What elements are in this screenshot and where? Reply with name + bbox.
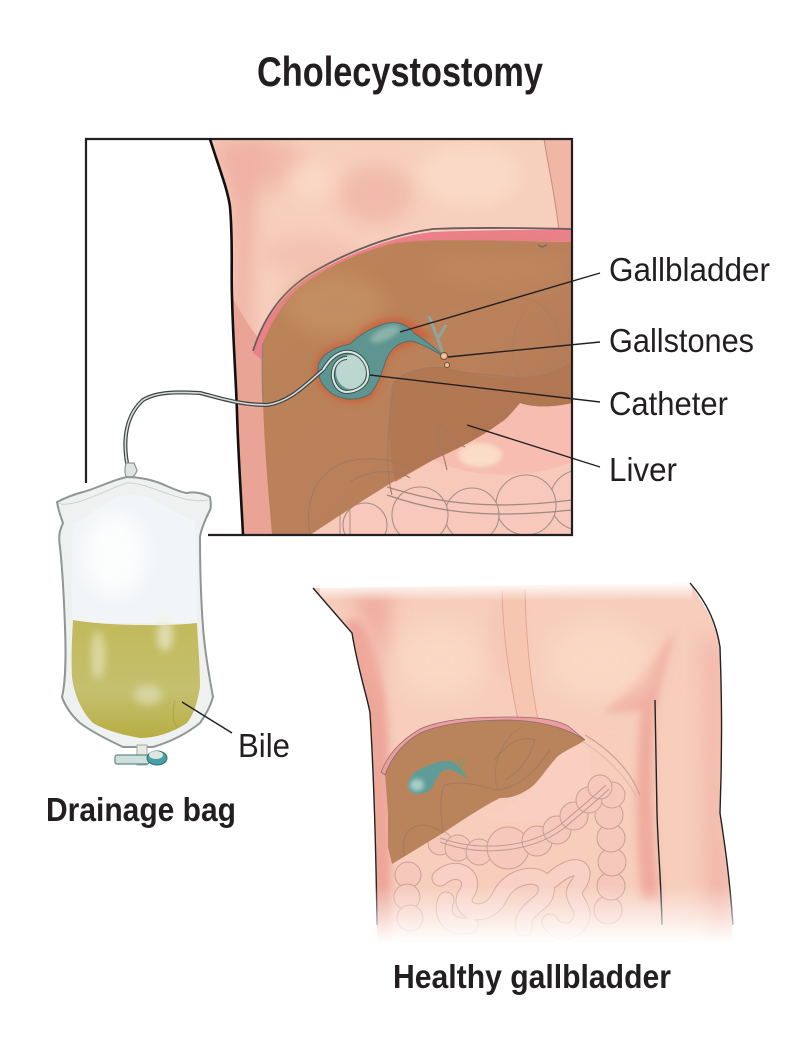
- label: drainage bag: Drainage bag: [46, 791, 236, 828]
- bile ducts: [429, 316, 446, 356]
- small bowel loops below liver: [340, 403, 571, 534]
- drainage tube: [125, 370, 323, 468]
- torso skin: [313, 583, 733, 950]
- label: healthy gallbladder: Healthy gallbladder: [393, 958, 671, 995]
- drainage bag: [57, 463, 213, 765]
- liver: [263, 240, 572, 535]
- label: gallbladder: Gallbladder: [609, 251, 770, 288]
- panel: inset anatomical illustration: [86, 139, 610, 547]
- esophagus: [502, 590, 538, 720]
- healthy gallbladder: [408, 761, 467, 794]
- healthy liver: [385, 720, 585, 864]
- gallstones: [440, 352, 450, 368]
- tube connector: [125, 463, 137, 479]
- colon: [394, 775, 626, 931]
- leader line: gallbladder: [400, 273, 600, 332]
- gallbladder: [318, 323, 446, 399]
- body outline: [210, 139, 243, 535]
- title: Cholecystostomy: [257, 48, 544, 95]
- bile fluid: [72, 620, 200, 738]
- diaphragm curve: [585, 735, 640, 795]
- label: liver: Liver: [609, 451, 677, 488]
- label: catheter: Catheter: [609, 385, 728, 422]
- drain valve: [115, 745, 167, 765]
- label: bile: Bile: [238, 727, 290, 764]
- torso outlines: [313, 583, 733, 925]
- bag outline: [57, 477, 213, 747]
- empty part of bag: [72, 495, 197, 623]
- pink lining above liver: [253, 229, 572, 360]
- stomach: [480, 742, 591, 823]
- label: gallstones: Gallstones: [609, 322, 754, 359]
- leader line: catheter: [370, 375, 600, 402]
- bottom fade: [360, 885, 745, 943]
- torso shading: [345, 592, 733, 950]
- leader line: liver: [467, 425, 600, 467]
- red inflammation glow around gallbladder: [314, 319, 432, 402]
- top fade: [320, 575, 692, 601]
- leader line: bile: [182, 702, 232, 733]
- small intestine loops: [440, 868, 582, 931]
- panel: healthy torso illustration: [313, 575, 745, 954]
- leader line: gallstones: [448, 342, 600, 357]
- skin of abdomen in inset: [212, 140, 571, 534]
- frame: [86, 139, 572, 535]
- catheter coil in gallbladder: [323, 352, 368, 392]
